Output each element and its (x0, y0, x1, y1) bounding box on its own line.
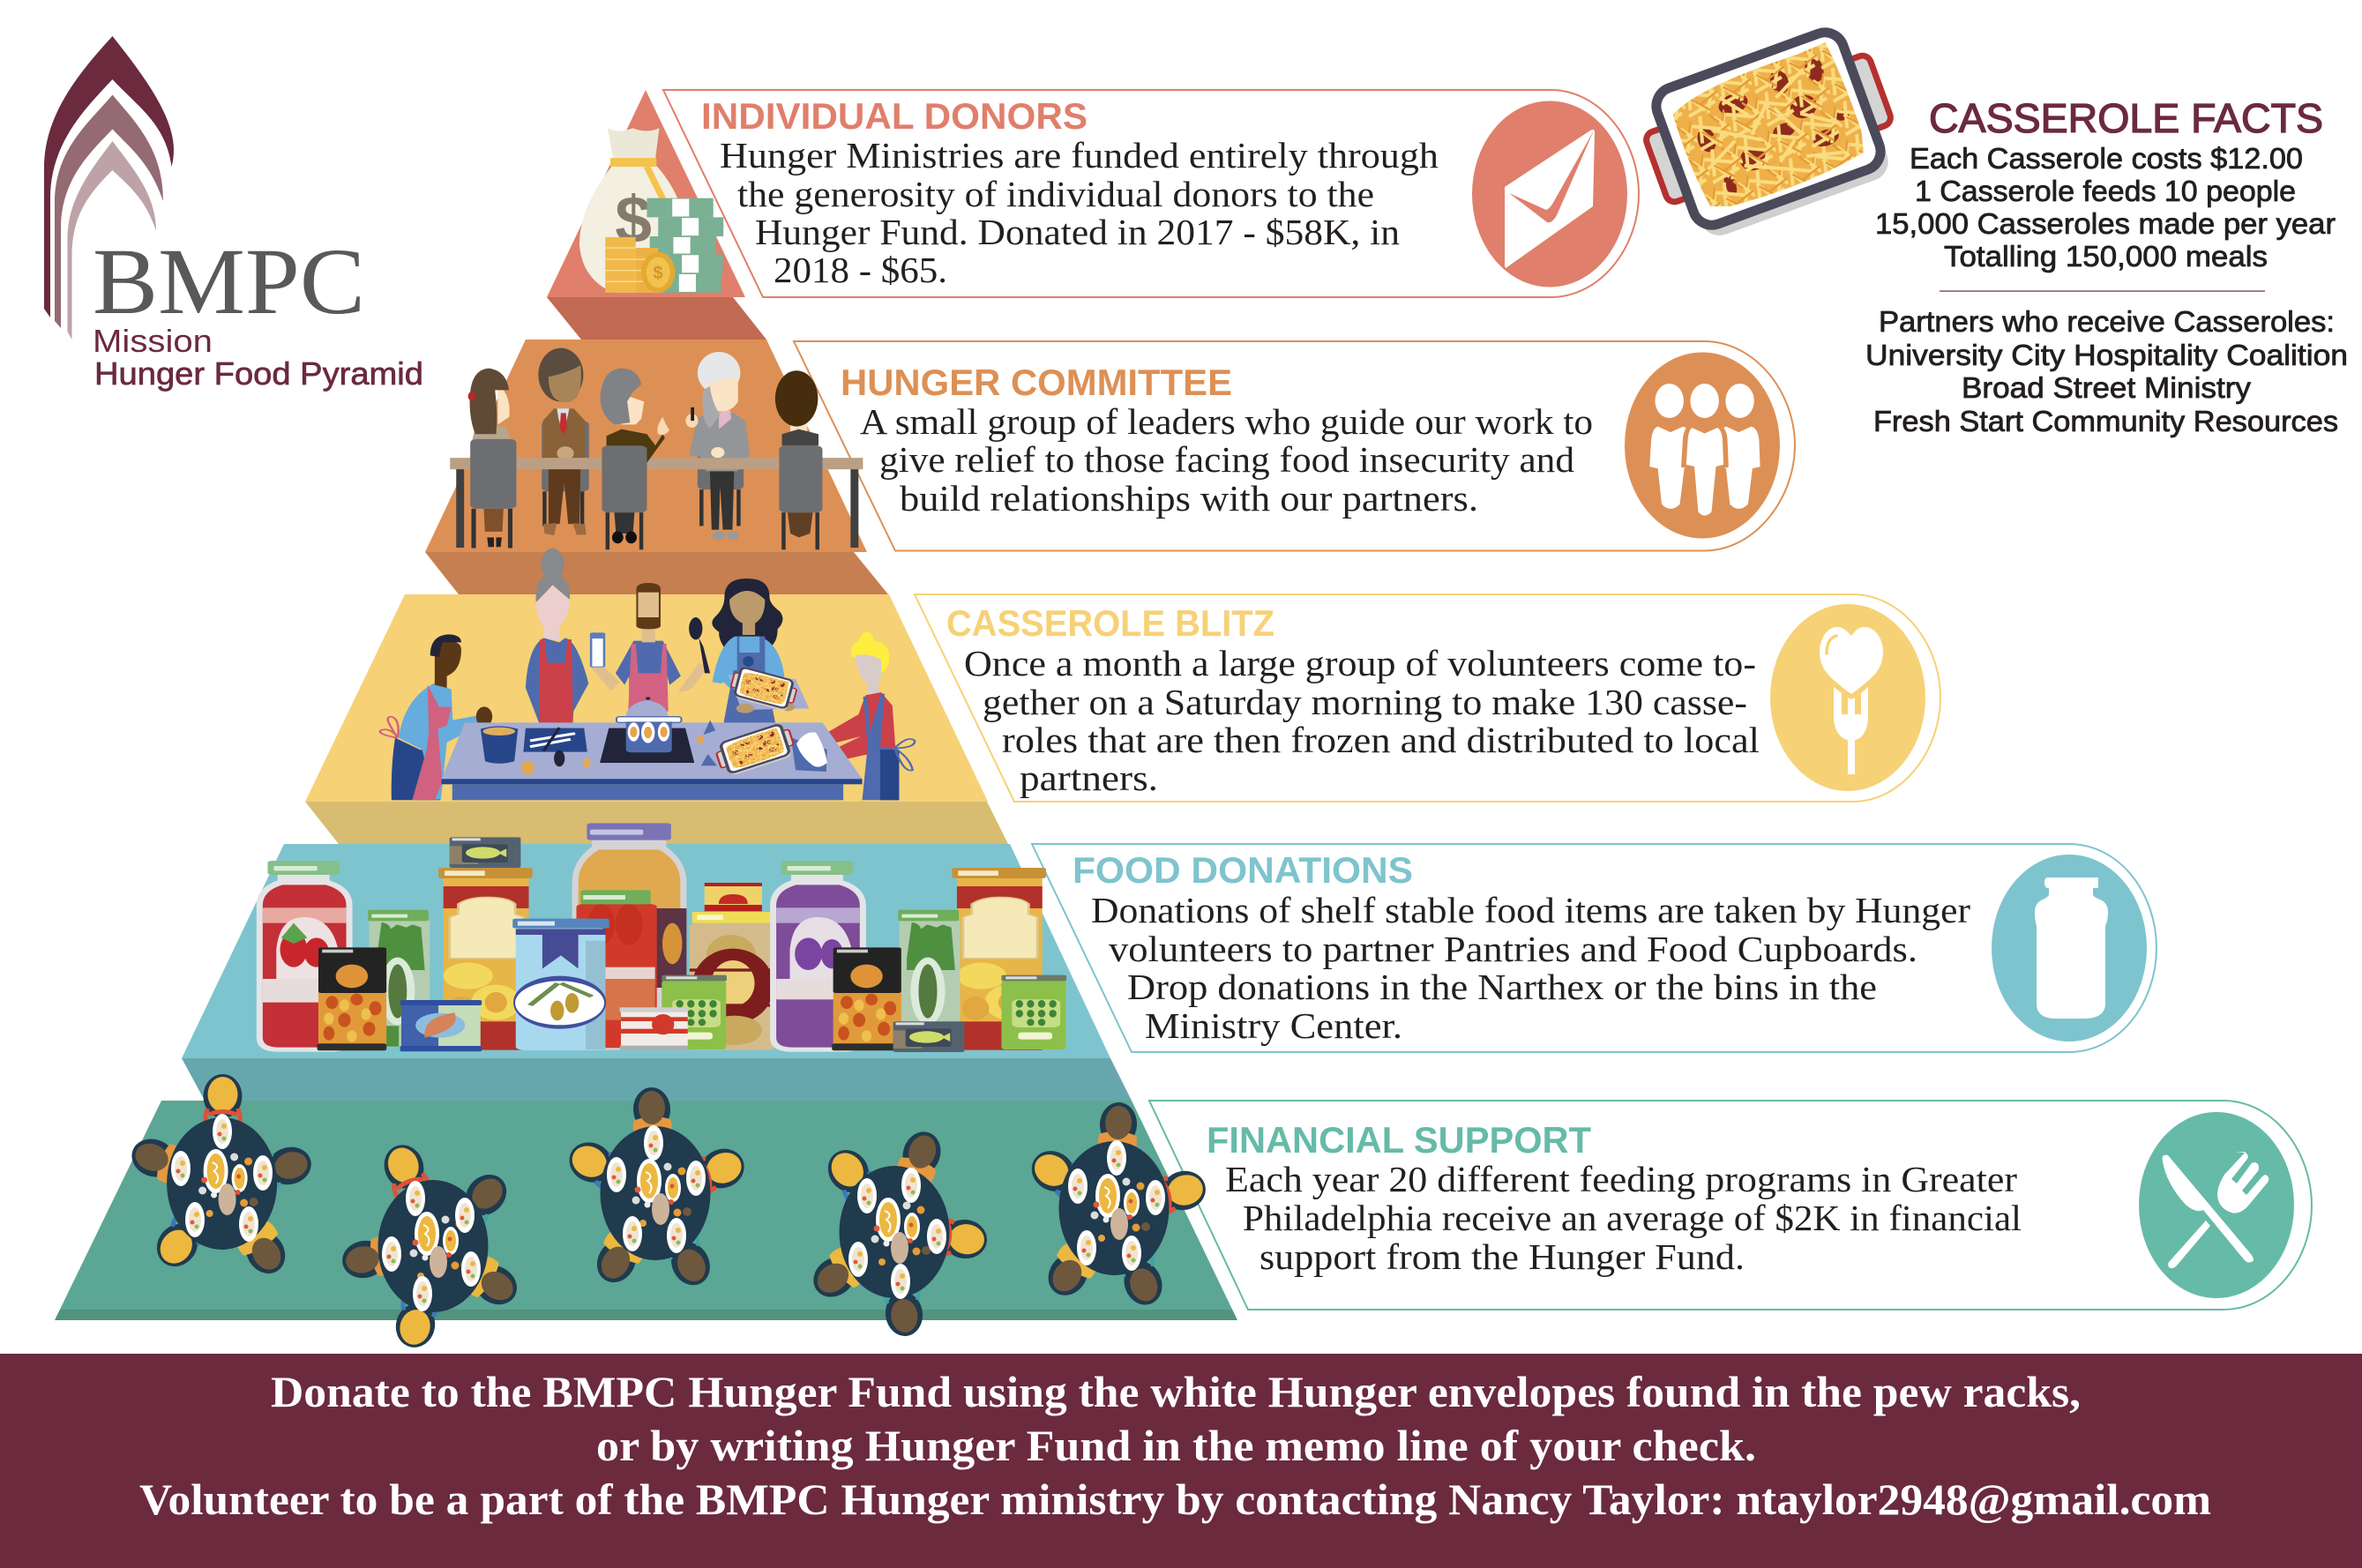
casserole facts: Broad Street Ministry (1962, 371, 2252, 404)
panel: food donations: Drop donations in the Narthex or the bins in the (1127, 967, 1877, 1007)
panel: financial support: Philadelphia receive an average of $2K in financial (1243, 1198, 2022, 1238)
panel: hunger committee (794, 341, 1795, 550)
panel: food donations (1032, 844, 2156, 1052)
panel: food donations: Donations of shelf stable food items are taken by Hunger (1091, 890, 1970, 930)
casserole carried by cook (729, 666, 798, 713)
casserole on table (714, 721, 797, 778)
table 5 (1024, 1101, 1210, 1310)
table (450, 458, 863, 548)
small red can (705, 883, 762, 911)
panel: casserole blitz (915, 594, 1940, 802)
cook: long-haired woman carrying dish (712, 579, 809, 723)
icon: jar (1992, 855, 2147, 1042)
table 4 (804, 1126, 989, 1338)
pot on burner and utensils (481, 697, 717, 775)
illustration: money bag, cash and coins: $ (653, 264, 663, 283)
cook: grey bun woman (526, 549, 588, 723)
illustration: casserole blitz cooks (380, 549, 915, 800)
footer band (0, 1354, 2362, 1568)
panel: hunger committee: build relationships with our partners. (900, 478, 1478, 519)
panel: individual donors: Hunger Ministries are funded entirely through (720, 135, 1439, 175)
panel: food donations: FOOD DONATIONS (1073, 849, 1413, 891)
casserole facts (1865, 95, 2348, 437)
panel: hunger committee: give relief to those facing food insecurity and (879, 439, 1574, 480)
panel: hunger committee: HUNGER COMMITTEE (841, 362, 1232, 403)
footer band: Donate to the BMPC Hunger Fund using the white Hunger envelopes found in the pew racks, (271, 1367, 2081, 1416)
panel: casserole blitz: roles that are then frozen and distributed to local (1002, 720, 1760, 760)
panel: casserole blitz: partners. (1020, 758, 1158, 798)
tomato bottle label (263, 907, 347, 1003)
plum bottle label (776, 907, 860, 999)
yellow-cap jar (690, 912, 774, 1050)
panel: casserole blitz: CASSEROLE BLITZ (946, 602, 1274, 644)
panel: individual donors (663, 90, 1639, 297)
illustration: committee around a table (450, 348, 863, 549)
table 1 (126, 1074, 316, 1282)
panel: hunger committee: A small group of leaders who guide our work to (860, 401, 1593, 442)
oven mitts and towel (791, 732, 827, 772)
icon: crossed knife and fork (2139, 1112, 2294, 1298)
panel: food donations: Ministry Center. (1145, 1005, 1402, 1046)
footer band: or by writing Hunger Fund in the memo line of your check. (596, 1421, 1756, 1470)
illustration: money bag, cash and coins: $ (615, 183, 652, 257)
salmon can (400, 1000, 482, 1051)
cook: man with apron at left (380, 634, 492, 800)
icon: three people (1625, 353, 1780, 538)
big orange jar (572, 823, 686, 1050)
panel: financial support: Each year 20 different feeding programs in Greater (1225, 1159, 2017, 1199)
person: woman with grey hair and jacket (685, 352, 750, 540)
person: woman from behind (468, 369, 517, 548)
panel: casserole blitz: gether on a Saturday morning to make 130 casse- (983, 682, 1747, 722)
footer band: Volunteer to be a part of the BMPC Hunger ministry by contacting Nancy Taylor: ntaylor2948@gmail.com (139, 1475, 2211, 1524)
casserole facts: 15,000 Casseroles made per year (1875, 207, 2336, 240)
table 3 (563, 1086, 750, 1292)
logo: BMPC arches and wordmark: BMPC (93, 230, 365, 334)
icon: heart on fork (1770, 604, 1925, 791)
cook: blonde woman with oven mitt (818, 631, 915, 800)
panel: casserole blitz: Once a month a large group of volunteers come to- (964, 643, 1756, 683)
kitchen table (442, 722, 863, 800)
panel: individual donors: Hunger Fund. Donated in 2017 - $58K, in (755, 212, 1400, 252)
red and white can (620, 1007, 688, 1050)
cook: bearded man with glass and spoon (590, 583, 710, 712)
table 2 (339, 1139, 526, 1351)
logo: BMPC arches and wordmark (44, 36, 423, 392)
food pyramid layers (55, 90, 1237, 1320)
olive jar (512, 919, 609, 1050)
illustration: jars and cans (257, 823, 1066, 1052)
person: dark-haired man from behind (775, 370, 822, 549)
icon: envelope with check (1472, 101, 1627, 287)
casserole facts: Totalling 150,000 meals (1944, 240, 2268, 273)
casserole facts: 1 Casserole feeds 10 people (1915, 175, 2296, 207)
panel: food donations: volunteers to partner Pantries and Food Cupboards. (1109, 929, 1917, 969)
panel: individual donors: 2018 - $65. (774, 250, 947, 290)
panel: financial support: FINANCIAL SUPPORT (1207, 1119, 1591, 1161)
panel: individual donors: INDIVIDUAL DONORS (701, 95, 1088, 137)
casserole facts: Fresh Start Community Resources (1873, 405, 2338, 437)
person: grey-haired man from behind, pointing (601, 369, 669, 549)
casserole dish illustration (1632, 20, 1910, 249)
casserole facts: Partners who receive Casseroles: (1879, 305, 2335, 338)
panel: financial support (1149, 1101, 2312, 1310)
panel: individual donors: the generosity of individual donors to the (737, 174, 1374, 214)
logo: BMPC arches and wordmark: Mission (93, 323, 213, 359)
illustration: dining tables (126, 1074, 1210, 1351)
logo: BMPC arches and wordmark: Hunger Food Pyramid (94, 355, 423, 392)
panel: financial support: support from the Hunger Fund. (1259, 1236, 1745, 1277)
tomato jar (577, 890, 657, 1048)
casserole facts: Each Casserole costs $12.00 (1910, 142, 2303, 175)
person: seated man in brown suit (538, 348, 589, 535)
casserole facts: CASSEROLE FACTS (1929, 95, 2323, 141)
casserole facts: University City Hospitality Coalition (1865, 339, 2348, 371)
illustration: money bag, cash and coins (579, 128, 723, 293)
